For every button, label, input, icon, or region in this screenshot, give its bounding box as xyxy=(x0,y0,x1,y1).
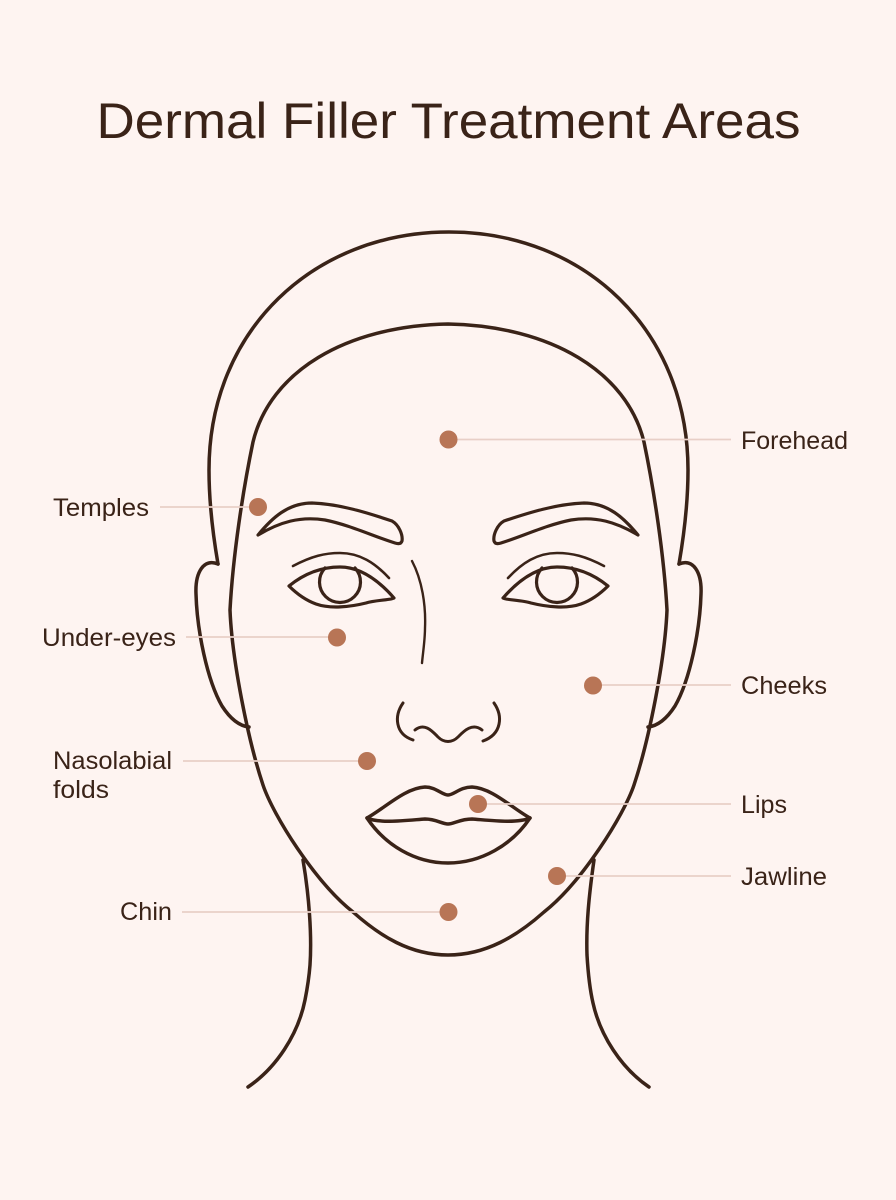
left ear xyxy=(196,563,249,727)
labels: Nasolabial xyxy=(53,747,172,775)
right ear xyxy=(648,563,701,727)
labels: Cheeks xyxy=(741,672,827,700)
right eyebrow xyxy=(494,503,638,544)
labels: Forehead xyxy=(741,427,848,455)
labels: Under-eyes xyxy=(42,624,176,652)
nose bridge xyxy=(412,561,425,663)
face outline xyxy=(230,324,667,955)
left eyebrow xyxy=(258,503,402,544)
lips xyxy=(367,787,530,863)
right eye xyxy=(503,553,608,607)
left eye xyxy=(289,553,394,607)
labels xyxy=(42,427,848,926)
labels: Temples xyxy=(53,494,149,522)
labels: Jawline xyxy=(741,863,827,891)
hair outline xyxy=(209,232,688,564)
labels: Chin xyxy=(120,898,172,926)
leader lines xyxy=(160,440,731,912)
title: Dermal Filler Treatment Areas xyxy=(96,92,800,149)
treatment dots xyxy=(249,430,602,921)
labels: Lips xyxy=(741,791,787,819)
left neck xyxy=(248,860,311,1087)
labels: folds xyxy=(53,776,109,804)
nose xyxy=(397,703,499,742)
face line drawing xyxy=(196,232,701,1087)
right neck xyxy=(587,860,649,1087)
